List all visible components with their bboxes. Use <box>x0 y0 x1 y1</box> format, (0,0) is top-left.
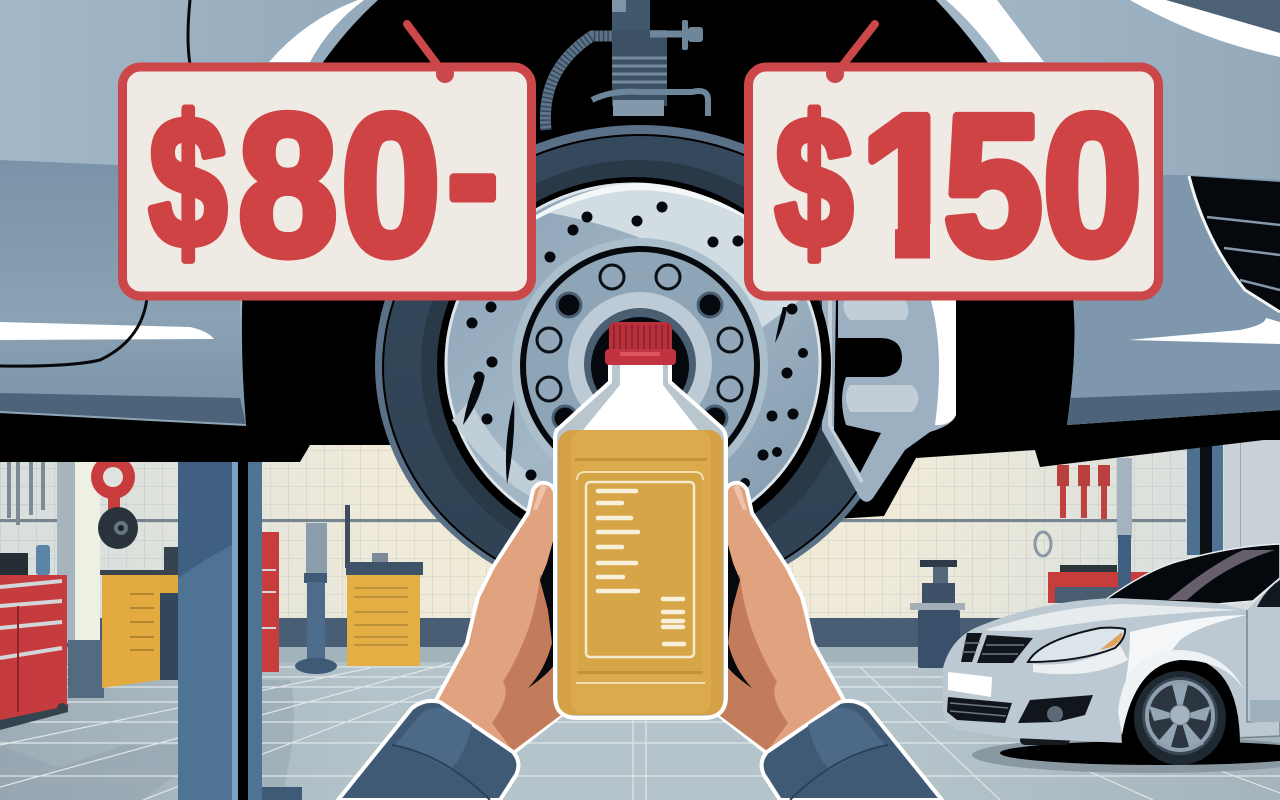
brake fluid bottle <box>555 322 726 718</box>
bottle cap <box>605 322 676 365</box>
left lift post <box>178 460 302 800</box>
price tag: $80- <box>122 24 532 297</box>
wheel hub <box>512 238 768 494</box>
rotor slots <box>463 307 787 484</box>
left body panel <box>0 0 378 425</box>
brake caliper <box>822 297 956 502</box>
right hand <box>715 483 942 800</box>
windshield <box>1105 544 1280 604</box>
red cabinet behind post <box>262 532 279 672</box>
right body panel <box>936 0 1280 425</box>
grille <box>961 633 1033 663</box>
price tag: $80-: $ <box>149 78 227 285</box>
price tag: $80-: 8 <box>238 74 338 297</box>
price tag: $80-: 0 <box>341 74 441 297</box>
left wall pillar <box>57 458 104 698</box>
price tag: $150 <box>748 24 1158 297</box>
car body <box>943 578 1280 743</box>
suspension strut <box>545 0 708 130</box>
price tag: $80-: - <box>448 79 498 269</box>
left hand <box>338 483 565 800</box>
left sleeve <box>338 701 518 800</box>
front vent <box>1189 176 1280 312</box>
wheel arch <box>1121 656 1240 745</box>
right sleeve <box>762 701 942 800</box>
headlight <box>1028 628 1125 662</box>
fluid exchange stand <box>295 523 337 674</box>
silver car, lower right <box>943 544 1280 773</box>
black underside and wheel well <box>0 0 1280 520</box>
rotor drill holes <box>466 202 808 488</box>
wall tools right <box>1035 458 1150 603</box>
brake assembly <box>375 125 956 605</box>
garage background <box>0 440 1280 800</box>
price tag: $150: 1 <box>860 74 960 297</box>
brake rotor <box>437 177 831 553</box>
hydraulic jack <box>910 560 965 668</box>
tiled floor <box>0 662 1280 800</box>
yellow cabinet centre <box>345 505 423 666</box>
price tag: $150: 0 <box>1043 74 1142 297</box>
tiled wall <box>0 440 1280 663</box>
fluid <box>558 430 723 715</box>
raised car body <box>0 0 1280 425</box>
hanging tools left <box>0 458 50 576</box>
side window <box>1257 580 1280 607</box>
lower bumper grille <box>947 695 1093 723</box>
right lift post <box>1187 440 1280 560</box>
number plate <box>948 672 992 697</box>
wall mounted hoist and tyre <box>91 455 138 549</box>
yellow cabinet left <box>100 547 180 688</box>
car wheel <box>1134 671 1226 765</box>
red tool chest left <box>0 575 68 730</box>
price tag: $150: $ <box>775 78 853 285</box>
bottle label <box>586 482 694 657</box>
tyre <box>375 125 905 605</box>
price tag: $150: 5 <box>943 74 1043 297</box>
